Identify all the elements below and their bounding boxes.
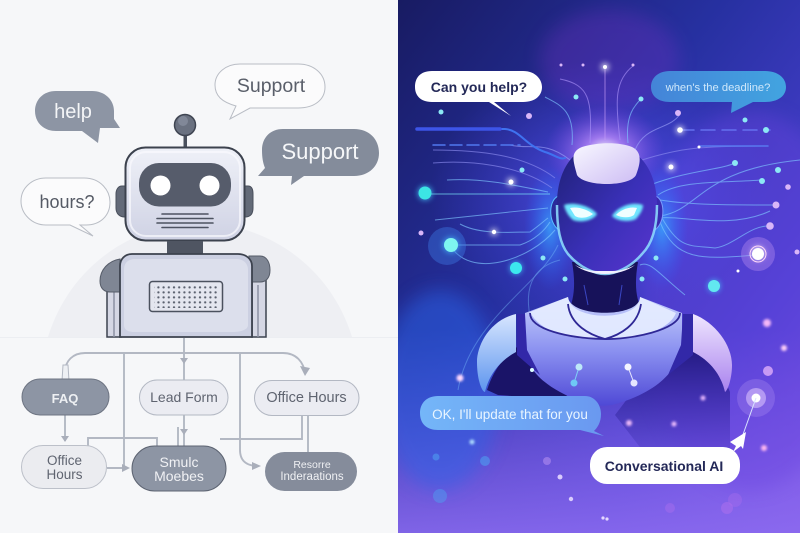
glowing data lines — [417, 129, 770, 158]
panel: right conversational AI — [380, 0, 800, 533]
robot torso — [120, 254, 252, 337]
flow node: Office Hours — [254, 380, 359, 416]
speech bubble: Support outline — [215, 64, 325, 119]
head — [557, 143, 657, 274]
flow node: Office Hours two-line: Office — [47, 453, 82, 468]
flow node: FAQ: FAQ — [52, 391, 78, 406]
glowing nodes — [418, 63, 800, 292]
icon: robot — [100, 114, 270, 337]
speech bubble: hours? — [21, 178, 110, 236]
eyes — [564, 204, 643, 221]
flow node: Smulc Moebes: Moebes — [154, 468, 204, 484]
robot mouth — [157, 214, 213, 228]
speech bubble: OK, I'll update that for you — [420, 396, 604, 436]
speech bubble: Can you help? — [415, 71, 542, 116]
speech bubble: Support outline: Support — [237, 75, 306, 97]
flow node: Lead Form — [140, 380, 228, 415]
robot neck — [167, 241, 203, 255]
flow node: Resorre Inderaations: Resorre — [293, 459, 331, 471]
harness lines — [530, 304, 680, 339]
panel: left traditional chatbot — [0, 0, 398, 533]
sparkle dots — [432, 319, 787, 521]
left shoulder pad — [477, 314, 516, 392]
robot ears — [116, 186, 253, 217]
speech bubble: when's the deadline?: when's the deadline? — [665, 82, 770, 94]
neck — [571, 262, 638, 313]
robot antenna — [174, 114, 196, 148]
speech bubble: Can you help?: Can you help? — [431, 79, 527, 95]
flow node: Office Hours: Office Hours — [266, 390, 347, 406]
robot arms — [100, 256, 270, 337]
robot figure — [477, 143, 732, 460]
flowchart arrowheads — [61, 358, 310, 472]
callout node with arrow — [730, 379, 775, 452]
neural circuit lines — [425, 66, 800, 390]
right shoulder pad — [693, 314, 732, 392]
speech bubble: help: help — [54, 101, 92, 123]
robot head — [126, 148, 244, 240]
chest nodes — [530, 364, 638, 386]
robot visor — [139, 163, 231, 206]
chest armour — [525, 297, 682, 406]
flow node: FAQ — [22, 379, 109, 415]
flow node: Lead Form: Lead Form — [150, 389, 218, 405]
ears — [551, 196, 663, 230]
speech bubble: hours?: hours? — [39, 192, 95, 212]
label: Conversational AI — [590, 447, 740, 484]
flow node: Smulc Moebes — [132, 446, 226, 491]
chest straps — [517, 314, 693, 375]
speech bubble: help — [35, 91, 120, 143]
robot chest grille — [150, 282, 222, 312]
speech bubble: when's the deadline? — [651, 71, 786, 113]
flow node: Resorre Inderaations: Inderaations — [280, 471, 344, 483]
dark arm shadows — [487, 347, 730, 448]
flow node: Resorre Inderaations — [265, 452, 357, 491]
flowchart connectors — [65, 338, 308, 468]
flow node: Smulc Moebes: Smulc — [160, 454, 198, 470]
speech bubble: Support dark: Support — [281, 139, 359, 164]
speech bubble: Support dark — [258, 129, 379, 185]
label: Conversational AI: Conversational AI — [605, 458, 723, 474]
speech bubble: OK, I'll update that for you: OK, I'll update that for you — [432, 407, 588, 422]
collar — [530, 297, 676, 339]
flow node: Office Hours two-line: Hours — [46, 467, 83, 482]
flow node: Office Hours two-line — [22, 446, 106, 488]
